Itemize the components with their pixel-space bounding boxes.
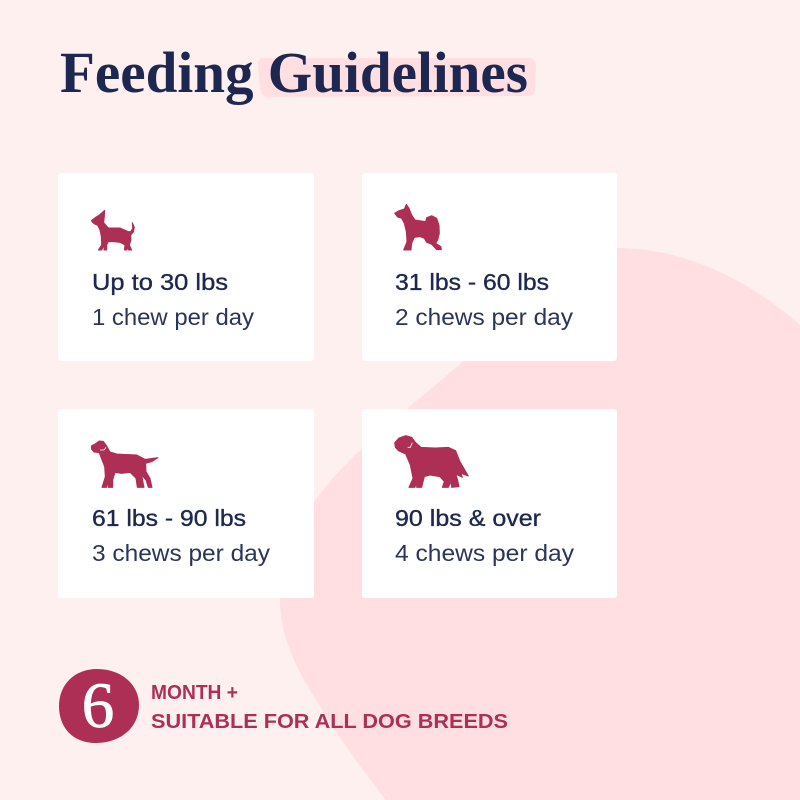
dosage: 4 chews per day [395,540,575,566]
panel: 61 to 90 lbs [58,409,314,598]
panel: up to 30 lbs [58,173,314,361]
age badge [59,669,139,743]
dosage: 2 chews per day [395,304,574,330]
dosage: 1 chew per day [92,304,255,330]
suitability note [151,682,508,733]
panel: 90 lbs and over [362,409,617,598]
weight label: Up to 30 lbs [92,269,228,295]
weight label: 61 lbs - 90 lbs [92,505,246,531]
suitability note: SUITABLE FOR ALL DOG BREEDS [151,711,508,733]
dosage: 3 chews per day [92,540,271,566]
weight label: 90 lbs & over [395,505,541,531]
title text: Feeding Guidelines [60,40,528,105]
title highlight [258,58,536,97]
icon: extra large dog [395,436,468,487]
background blob [280,248,800,800]
weight label: 31 lbs - 60 lbs [395,269,549,295]
icon: medium dog [395,204,441,250]
suitability note: MONTH + [151,682,238,704]
age badge: 6 [82,670,114,742]
icon: large dog [91,441,158,487]
panel: 31 to 60 lbs [362,173,617,361]
title [60,40,536,105]
icon: small dog [91,210,134,250]
